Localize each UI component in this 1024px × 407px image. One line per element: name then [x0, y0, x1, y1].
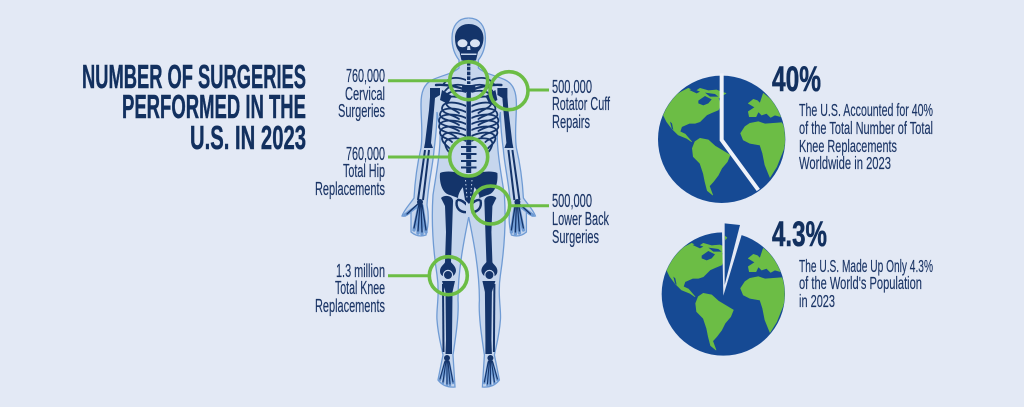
marker: lower back: 500,000 [552, 191, 592, 211]
marker: total knee [315, 257, 467, 316]
stat: 40 percent: Knee Replacements [799, 136, 897, 156]
marker: lower back: Surgeries [552, 227, 599, 247]
stat: 4.3 percent [772, 215, 933, 311]
stat: 4.3 percent: in 2023 [799, 291, 835, 311]
marker: total knee: 1.3 million [336, 261, 385, 281]
marker: lower back: Lower Back [552, 209, 610, 229]
stat: 40 percent: The U.S. Accounted for 40% [799, 100, 933, 120]
stat: 4.3 percent: The U.S. Made Up Only 4.3% [799, 256, 933, 276]
marker: cervical: 760,000 [346, 66, 385, 86]
marker: rotator cuff: Repairs [552, 112, 590, 132]
stat: 4.3 percent: 4.3% [772, 215, 827, 254]
stat: 40 percent [772, 60, 933, 173]
infographic canvas [83, 17, 933, 388]
stat: 40 percent: of the Total Number of Total [799, 118, 933, 138]
globe pie: 4.3 percent [662, 223, 787, 356]
stat: 4.3 percent: of the World's Population [799, 273, 922, 293]
marker: cervical: Surgeries [338, 101, 385, 121]
human body with skeleton [402, 18, 535, 387]
marker: cervical: Cervical [345, 84, 385, 104]
marker: rotator cuff: Rotator Cuff [552, 94, 611, 114]
marker: rotator cuff [490, 72, 611, 132]
marker: total hip: Replacements [315, 179, 385, 199]
marker: lower back [472, 186, 610, 247]
marker: total knee: Replacements [315, 296, 385, 316]
marker: total hip [315, 138, 488, 199]
stat: 40 percent: Worldwide in 2023 [799, 153, 891, 173]
marker: rotator cuff: 500,000 [552, 77, 592, 97]
title: PERFORMED IN THE [122, 88, 306, 125]
marker: total knee: Total Knee [335, 278, 385, 298]
marker: total hip: 760,000 [346, 144, 385, 164]
marker: total hip: Total Hip [343, 161, 385, 181]
marker: cervical [338, 62, 488, 121]
title: NUMBER OF SURGERIES [82, 58, 306, 95]
spine [461, 62, 476, 204]
stat: 40 percent: 40% [772, 60, 821, 99]
title [82, 58, 306, 156]
globe pie: 40 percent [658, 73, 787, 203]
skull [455, 24, 484, 60]
title: U.S. IN 2023 [190, 119, 306, 156]
